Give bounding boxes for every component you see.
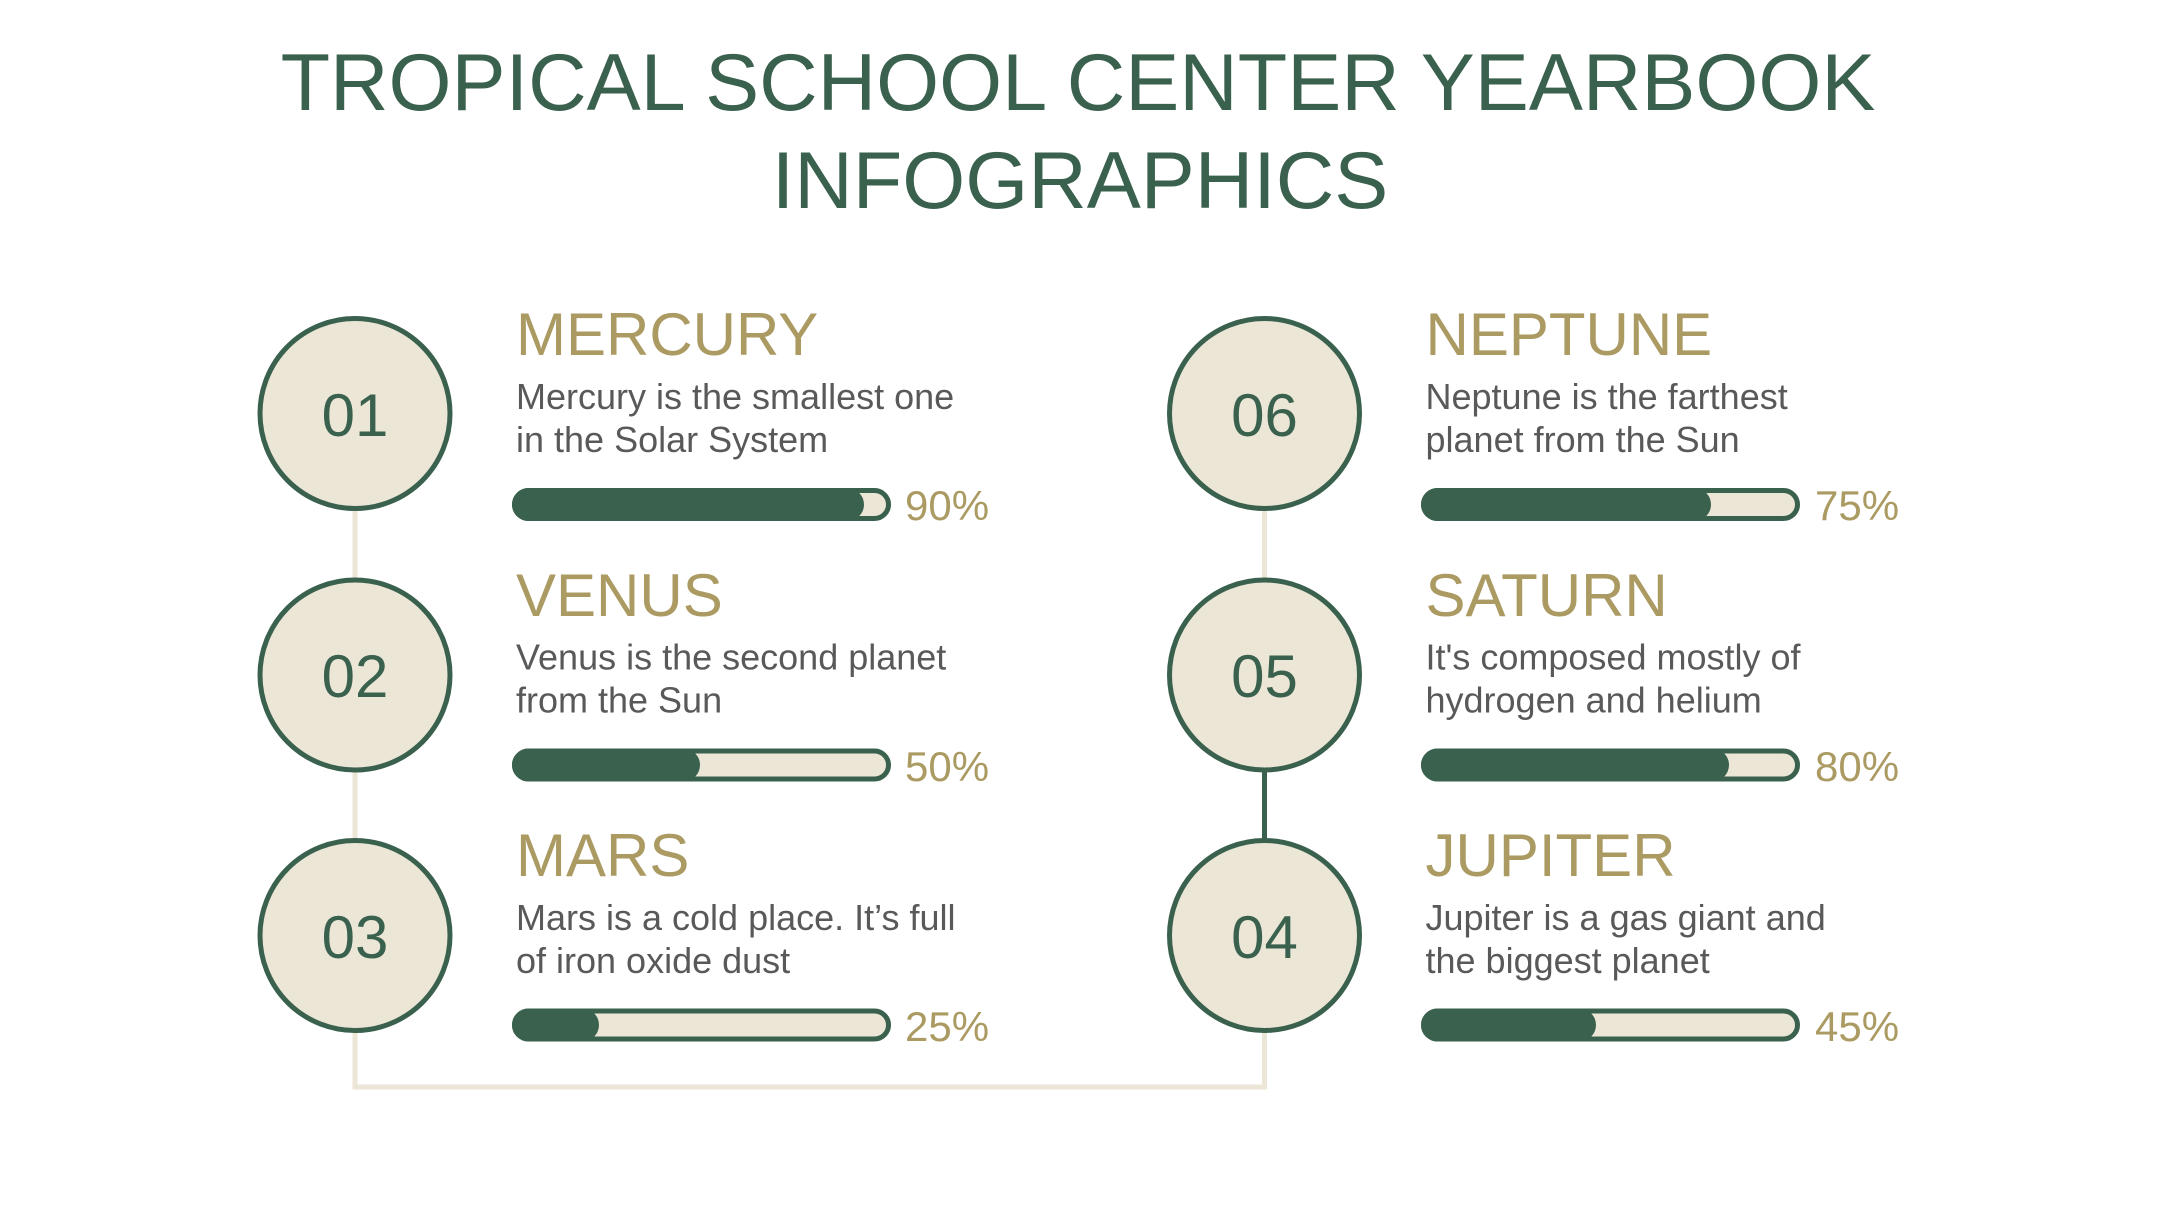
number circle 02 <box>260 580 450 770</box>
percentage 25%: 25% <box>905 1003 989 1050</box>
panel: 05 Saturn <box>1170 562 1899 790</box>
number circle 01 <box>260 318 450 508</box>
number circle 05: 05 <box>1231 643 1298 710</box>
heading Mars: MARS <box>516 822 689 889</box>
panel: 02 Venus <box>260 562 989 790</box>
description Jupiter: Jupiter is a gas giant and <box>1426 897 1826 938</box>
number circle 06: 06 <box>1231 382 1298 449</box>
percentage 75%: 75% <box>1815 482 1899 529</box>
number circle 04 <box>1170 840 1360 1030</box>
description Mars: of iron oxide dust <box>516 940 790 981</box>
heading Mercury: MERCURY <box>516 301 818 368</box>
heading Neptune: NEPTUNE <box>1426 301 1712 368</box>
description Venus: from the Sun <box>516 680 722 720</box>
progress bar 45% <box>1421 1008 1798 1042</box>
panel: 04 Jupiter <box>1170 822 1899 1050</box>
description Neptune: Neptune is the farthest <box>1426 376 1788 417</box>
percentage 90%: 90% <box>905 482 989 529</box>
description Neptune: planet from the Sun <box>1426 419 1740 460</box>
number circle 03: 03 <box>322 904 388 971</box>
description Mercury: in the Solar System <box>516 419 828 460</box>
heading Saturn: SATURN <box>1426 562 1668 629</box>
panel: 03 Mars <box>260 822 989 1050</box>
description Saturn: hydrogen and helium <box>1426 680 1762 720</box>
title <box>281 38 1875 226</box>
description Jupiter: the biggest planet <box>1426 940 1710 981</box>
connector: 05 to 04 <box>1262 760 1267 850</box>
percentage 80%: 80% <box>1815 743 1899 790</box>
number circle 03 <box>260 840 450 1030</box>
progress bar 90% <box>512 488 888 521</box>
number circle 05 <box>1170 580 1360 770</box>
description Mercury: Mercury is the smallest one <box>516 376 954 417</box>
panel: 06 Neptune <box>1170 301 1899 529</box>
panel: 01 Mercury <box>260 301 989 529</box>
title: INFOGRAPHICS <box>772 136 1388 226</box>
heading Venus: VENUS <box>516 562 723 629</box>
percentage 45%: 45% <box>1815 1003 1899 1050</box>
progress bar 75% <box>1421 488 1798 521</box>
progress bar 50% <box>512 748 888 782</box>
description Mars: Mars is a cold place. It’s full <box>516 897 956 938</box>
number circle 06 <box>1170 318 1360 508</box>
number circle 01: 01 <box>322 382 388 449</box>
description Saturn: It's composed mostly of <box>1426 636 1802 678</box>
progress bar 80% <box>1421 748 1798 782</box>
connector: 06 to 05 <box>1262 500 1267 600</box>
heading Jupiter: JUPITER <box>1426 822 1676 889</box>
title: TROPICAL SCHOOL CENTER YEARBOOK <box>281 38 1875 128</box>
percentage 50%: 50% <box>905 743 989 790</box>
description Venus: Venus is the second planet <box>516 636 946 678</box>
number circle 02: 02 <box>322 643 388 710</box>
connector: left column and bottom link <box>355 500 1264 1087</box>
progress bar 25% <box>512 1008 888 1042</box>
number circle 04: 04 <box>1231 904 1298 971</box>
